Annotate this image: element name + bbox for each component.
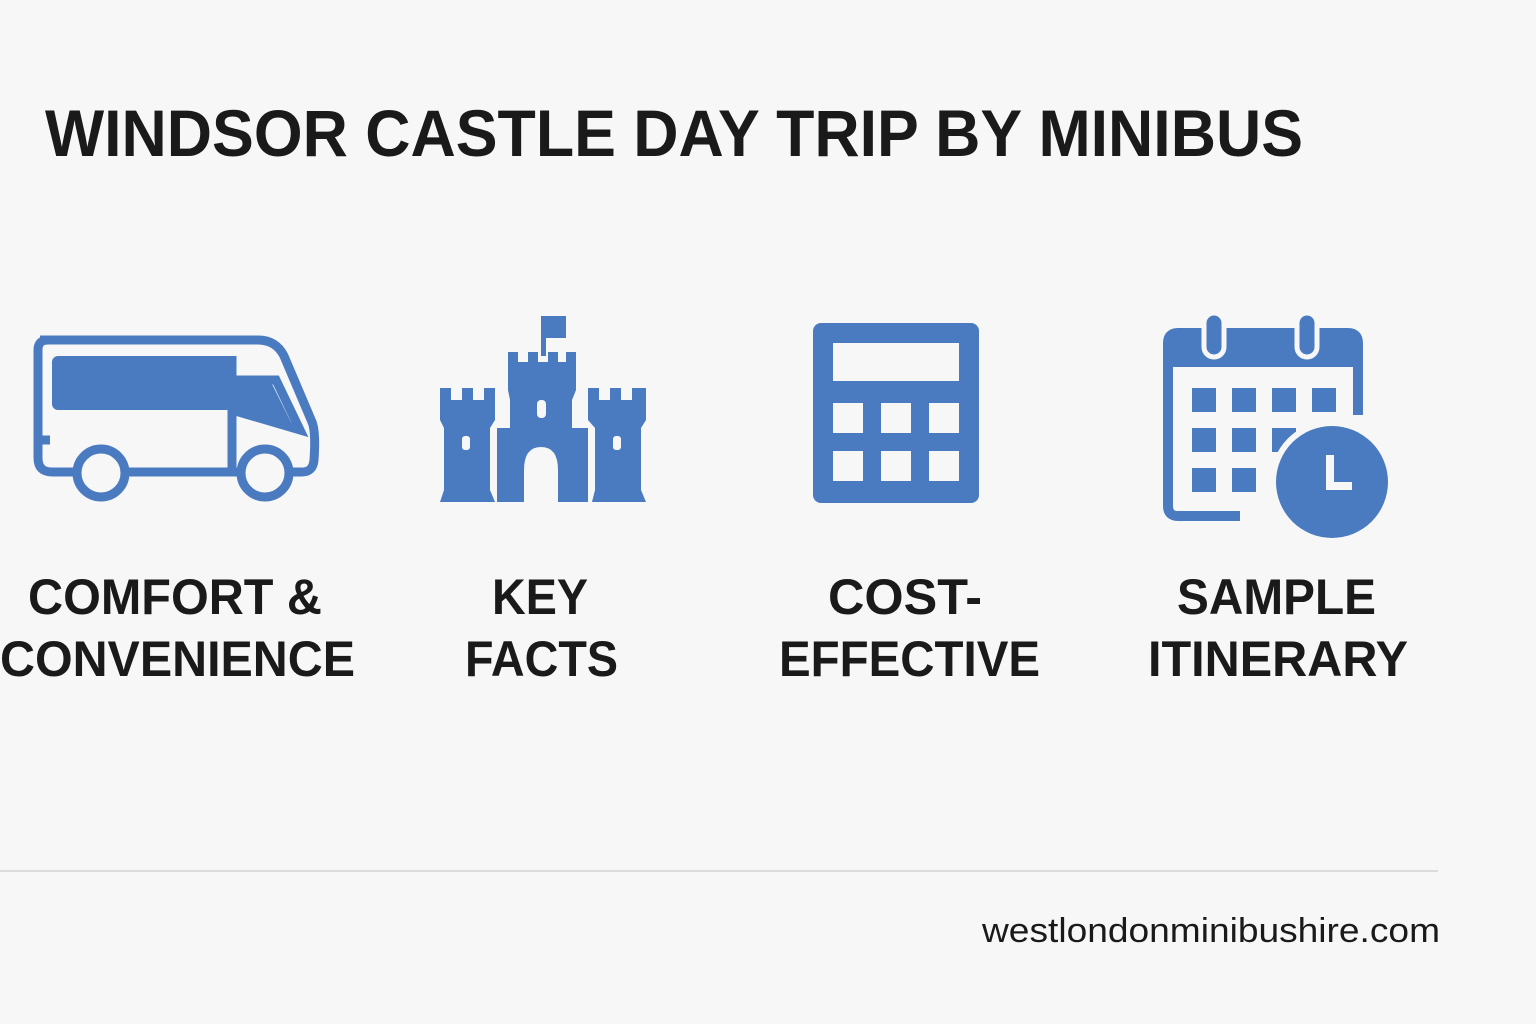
label: comfort & convenience <box>0 569 355 687</box>
label: sample itinerary: ITINERARY <box>1148 631 1408 687</box>
label: key facts <box>465 569 618 687</box>
label: cost-effective: EFFECTIVE <box>779 631 1040 687</box>
title: WINDSOR CASTLE DAY TRIP BY MINIBUS <box>45 96 1303 170</box>
label: cost-effective: COST- <box>828 569 982 625</box>
label: sample itinerary: SAMPLE <box>1177 569 1376 625</box>
label: sample itinerary <box>1148 569 1408 687</box>
icon: calculator <box>813 323 979 503</box>
label: cost-effective <box>779 569 1040 687</box>
icon: minibus <box>38 340 315 497</box>
label: comfort & convenience: COMFORT & <box>28 569 322 625</box>
label: key facts: FACTS <box>465 631 618 687</box>
label: key facts: KEY <box>492 569 588 625</box>
icon: calendar with clock <box>1168 313 1394 544</box>
icon: castle <box>440 316 646 502</box>
label: comfort & convenience: CONVENIENCE <box>0 631 355 687</box>
footer url: westlondonminibushire.com <box>981 912 1440 950</box>
